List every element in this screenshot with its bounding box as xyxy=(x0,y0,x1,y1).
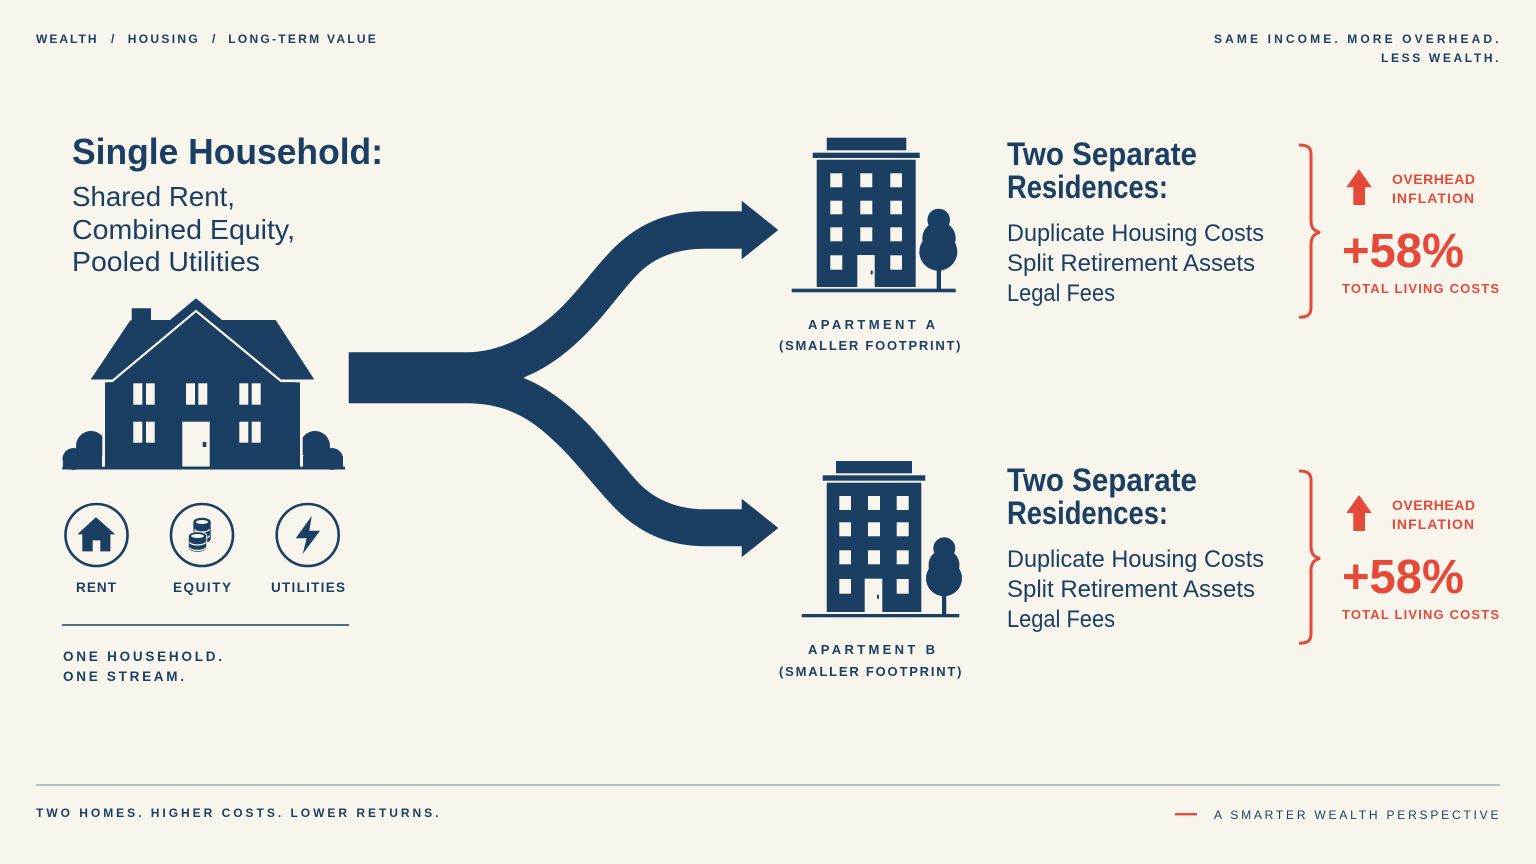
heading: two separate residences: Residences: xyxy=(1007,169,1168,205)
label: apartment B: (SMALLER FOOTPRINT) xyxy=(779,664,962,679)
bracket xyxy=(1299,145,1320,317)
header breadcrumb: / xyxy=(212,32,216,46)
text block: cost list xyxy=(1007,546,1264,633)
icon: equity coins xyxy=(171,504,233,566)
label: total living costs: TOTAL LIVING COSTS xyxy=(1342,281,1499,296)
text block: household benefits xyxy=(72,181,295,277)
heading: two separate residences xyxy=(1007,136,1197,205)
label: apartment B: APARTMENT B xyxy=(808,642,935,657)
text block: cost list: Legal Fees xyxy=(1007,606,1115,633)
icon: red up arrow xyxy=(1346,495,1372,531)
label: apartment A: (SMALLER FOOTPRINT) xyxy=(779,338,960,353)
label: overhead inflation: OVERHEAD xyxy=(1392,171,1475,187)
icon: apartment building B xyxy=(802,461,962,617)
footer message: TWO HOMES. HIGHER COSTS. LOWER RETURNS. xyxy=(36,806,438,820)
text block: household benefits: Shared Rent, xyxy=(72,181,235,212)
icon labels: EQUITY xyxy=(173,580,231,595)
stat: +58%: +58% xyxy=(1342,551,1464,604)
text block: cost list xyxy=(1007,220,1264,307)
label: apartment B xyxy=(779,642,962,679)
icon: red up arrow xyxy=(1346,169,1372,205)
label: overhead inflation: OVERHEAD xyxy=(1392,497,1475,513)
label: total living costs: TOTAL LIVING COSTS xyxy=(1342,607,1499,622)
arrow: splitting flow xyxy=(349,201,778,557)
heading: two separate residences: Two Separate xyxy=(1007,136,1197,172)
caption: one household: ONE HOUSEHOLD. xyxy=(63,649,222,664)
label: overhead inflation: INFLATION xyxy=(1392,516,1474,532)
panel: apartment A xyxy=(779,136,1499,353)
caption: one household: ONE STREAM. xyxy=(63,669,184,684)
header tagline: LESS WEALTH. xyxy=(1381,51,1498,65)
header breadcrumb xyxy=(36,32,376,46)
panel: single household xyxy=(62,131,383,684)
label: apartment A: APARTMENT A xyxy=(808,317,936,332)
text block: cost list: Duplicate Housing Costs xyxy=(1007,220,1264,247)
icon labels: UTILITIES xyxy=(271,580,345,595)
caption: one household xyxy=(63,649,222,684)
header breadcrumb: HOUSING xyxy=(128,32,198,46)
label: overhead inflation xyxy=(1392,497,1475,532)
icon: house xyxy=(62,298,345,470)
icon: utilities bolt xyxy=(277,504,339,566)
text block: cost list: Duplicate Housing Costs xyxy=(1007,546,1264,573)
header breadcrumb: / xyxy=(111,32,115,46)
bracket xyxy=(1299,471,1320,643)
stat: +58%: +58% xyxy=(1342,225,1464,278)
header tagline: SAME INCOME. MORE OVERHEAD. xyxy=(1214,32,1498,46)
heading: two separate residences xyxy=(1007,462,1197,531)
text block: household benefits: Combined Equity, xyxy=(72,214,295,245)
header breadcrumb: LONG-TERM VALUE xyxy=(228,32,376,46)
icon labels xyxy=(76,580,345,595)
icon: apartment building A xyxy=(792,138,957,292)
text block: household benefits: Pooled Utilities xyxy=(72,246,260,277)
header breadcrumb: WEALTH xyxy=(36,32,96,46)
panel: apartment B xyxy=(779,461,1499,679)
header tagline xyxy=(1214,32,1498,65)
text block: cost list: Legal Fees xyxy=(1007,280,1115,307)
heading: two separate residences: Residences: xyxy=(1007,495,1168,531)
footer brand: A SMARTER WEALTH PERSPECTIVE xyxy=(1214,808,1498,822)
icon: rent xyxy=(66,504,128,566)
label: overhead inflation xyxy=(1392,171,1475,206)
text block: cost list: Split Retirement Assets xyxy=(1007,576,1255,603)
icon labels: RENT xyxy=(76,580,117,595)
label: overhead inflation: INFLATION xyxy=(1392,190,1474,206)
heading: single household: Single Household: xyxy=(72,131,383,172)
label: apartment A xyxy=(779,317,960,353)
heading: two separate residences: Two Separate xyxy=(1007,462,1197,498)
text block: cost list: Split Retirement Assets xyxy=(1007,250,1255,277)
